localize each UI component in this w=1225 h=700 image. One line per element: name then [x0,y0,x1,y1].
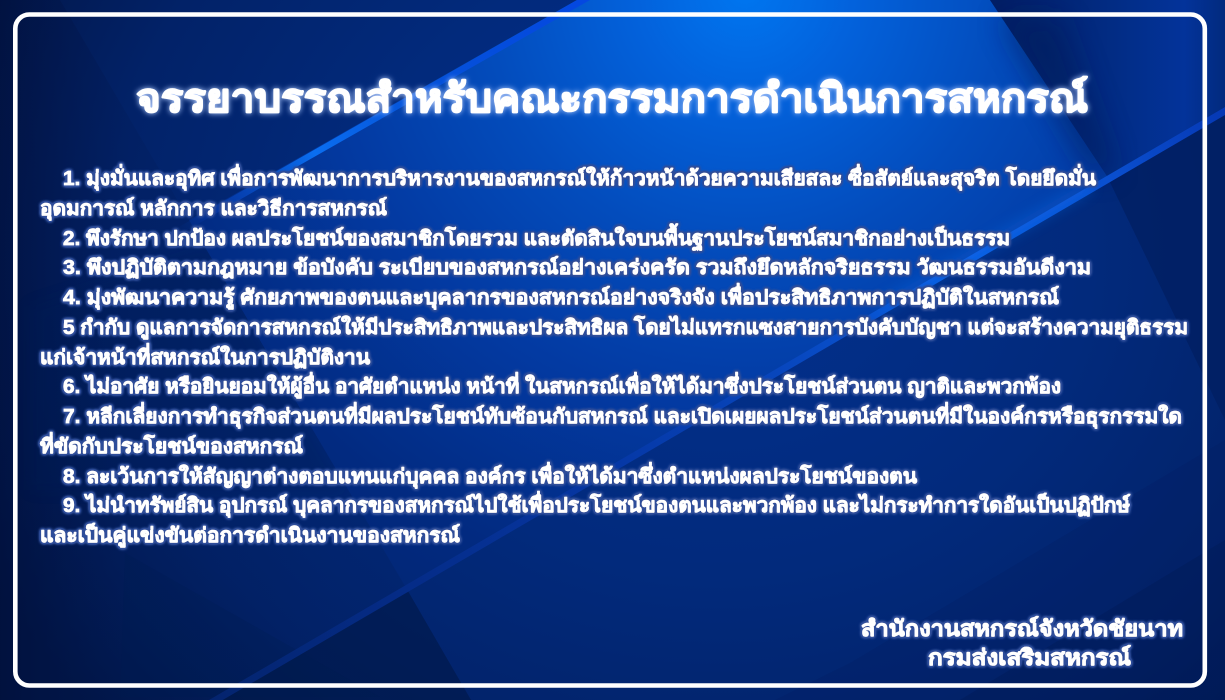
footer: issuing office [861,616,1183,670]
item 9: และเป็นคู่แข่งขันต่อการดำเนินงานของสหกรณ์ [40,522,460,549]
item 7 [40,401,1182,458]
item 1: อุดมการณ์ หลักการ และวิธีการสหกรณ์ [40,197,387,221]
footer: issuing office: สำนักงานสหกรณ์จังหวัดชัยนาท [861,616,1183,641]
item 2: 2. พึงรักษา ปกป้อง ผลประโยชน์ของสมาชิกโดยรวม และตัดสินใจบนพื้นฐานประโยชน์สมาชิกอย่างเป็นธรรม [63,223,1010,252]
item 1 [40,163,1096,221]
item 9: 9. ไม่นำทรัพย์สิน อุปกรณ์ บุคลากรของสหกรณ์ไปใช้เพื่อประโยชน์ของตนและพวกพ้อง และไม่กระทำการใดอันเป็นปฏิปักษ์ [63,490,1130,518]
item 8: 8. ละเว้นการให้สัญญาต่างตอบแทนแก่บุคคล องค์กร เพื่อให้ได้มาซึ่งตำแหน่งผลประโยชน์ของตน [63,461,917,489]
item 9 [40,490,1130,549]
item 5: แก่เจ้าหน้าที่สหกรณ์ในการปฏิบัติงาน [40,342,370,369]
item 5: 5 กำกับ ดูแลการจัดการสหกรณ์ให้มีประสิทธิภาพและประสิทธิผล โดยไม่แทรกแซงสายการบังคับบัญชา แต่จะสร้างความยุติธรรม [63,315,1188,341]
item 5 [40,315,1188,369]
title: จรรยาบรรณสำหรับคณะกรรมการดำเนินการสหกรณ์ [136,76,1088,121]
item 3: 3. พึงปฏิบัติตามกฎหมาย ข้อบังคับ ระเบียบของสหกรณ์อย่างเคร่งครัด รวมถึงยึดหลักจริยธรรม วัฒนธรรมอันดีงาม [63,256,1091,279]
item 7: 7. หลีกเลี่ยงการทำธุรกิจส่วนตนที่มีผลประโยชน์ทับซ้อนกับสหกรณ์ และเปิดเผยผลประโยชน์ส่วนตนที่มีในองค์กรหรือธุรกรรมใด [63,401,1182,429]
item 1: 1. มุ่งมั่นและอุทิศ เพื่อการพัฒนาการบริหารงานของสหกรณ์ให้ก้าวหน้าด้วยความเสียสละ ซื่อสัตย์และสุจริต โดยยึดมั่น [63,163,1096,191]
code of ethics text block [40,163,1188,549]
footer: issuing office: กรมส่งเสริมสหกรณ์ [928,645,1131,670]
item 7: ที่ขัดกับประโยชน์ของสหกรณ์ [40,431,303,458]
item 6: 6. ไม่อาศัย หรือยินยอมให้ผู้อื่น อาศัยตำแหน่ง หน้าที่ ในสหกรณ์เพื่อให้ได้มาซึ่งประโยชน์ส่วนตน ญาติและพวกพ้อง [63,371,1061,400]
item 4: 4. มุ่งพัฒนาความรู้ ศักยภาพของตนและบุคลากรของสหกรณ์อย่างจริงจัง เพื่อประสิทธิภาพการปฏิบัติในสหกรณ์ [63,282,1059,311]
